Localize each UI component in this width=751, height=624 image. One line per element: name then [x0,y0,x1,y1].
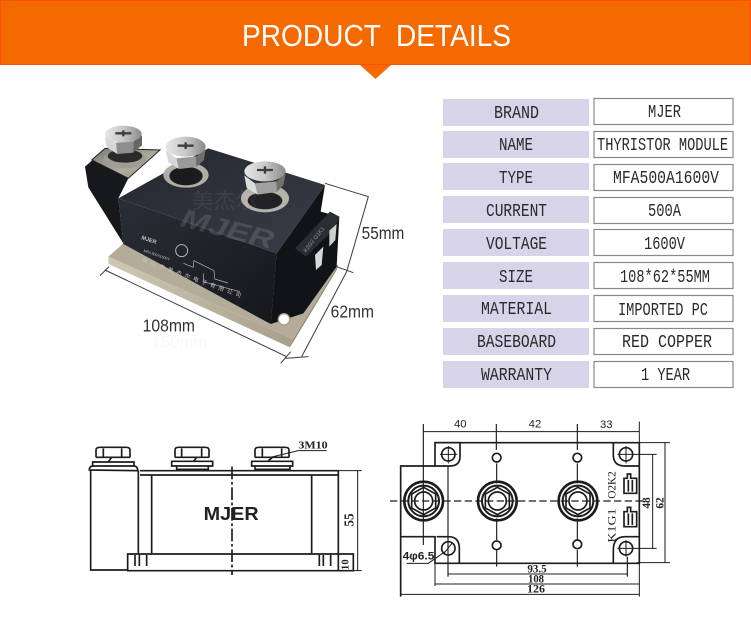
specification table [443,98,733,388]
row: size: 108*62*55MM [620,268,710,288]
mounting hole [278,314,290,325]
row: name [443,131,733,158]
row: voltage: VOLTAGE [486,235,547,255]
row: brand [443,98,733,126]
product photo [85,126,404,363]
dimension: 55 [338,471,362,571]
bottom dimensions: 126 [527,584,545,596]
top dimensions [423,418,639,443]
row: material [443,295,733,322]
row: warranty: 1 YEAR [641,366,690,386]
row: type [443,163,733,190]
title: PRODUCT DETAILS [242,18,511,53]
brand label: MJER [204,503,259,524]
row: size [443,262,733,289]
top dimensions: 40 [454,418,467,430]
module label: MFA 500A1600V [143,249,171,262]
row: name: NAME [499,136,533,156]
row: current: 500A [648,202,681,222]
top dimensions: 33 [600,419,613,431]
outline [401,443,639,597]
row: baseboard: RED COPPER [622,333,712,353]
row: type: TYPE [499,169,533,189]
row: size: SIZE [499,268,533,288]
bolt 2 [163,137,209,188]
corner ears [435,443,639,563]
row: brand: BRAND [494,104,539,124]
top view drawing: O2K2 [607,471,619,499]
terminal 3 [559,482,597,520]
callout: hole size: 4φ6.5 [403,550,434,562]
base plate [108,243,338,347]
row: voltage: 1600V [644,235,685,255]
watermark: 美杰尔 [192,183,258,215]
base flange [128,554,353,571]
row: voltage [443,229,733,256]
terminals [89,447,293,471]
row: material: MATERIAL [481,300,552,320]
terminal 1 [404,482,443,520]
bolt 3 [241,161,289,212]
dimension: 108mm: 108mm [143,316,195,336]
module label: 黄山市美杰尔电子有限公司 [141,256,243,300]
row: warranty [443,361,733,388]
center lines [390,499,643,503]
bolt 1 [103,126,147,168]
right dimensions: 62 [654,497,666,509]
module body [85,148,339,324]
row: current [443,196,733,224]
row: current: CURRENT [486,202,547,222]
dimension: 55mm: 55mm [362,223,404,243]
watermark [178,183,278,255]
top dimensions: 42 [529,418,541,430]
top view drawing [390,418,670,597]
bottom dimensions [401,563,639,597]
row: baseboard [443,328,733,355]
header banner [0,0,751,79]
mounting holes [440,446,657,557]
terminal glyphs [624,474,637,527]
module body outline [91,471,338,571]
side view drawing [89,441,362,575]
callout: 3M10 [273,441,328,457]
row: material: IMPORTED PC [618,301,708,321]
callout: hole size [403,550,445,563]
module label [140,235,243,300]
dimension: 10: 10 [341,559,352,570]
dimension lines [100,183,368,363]
module label: MJER [140,235,157,246]
row: warranty: WARRANTY [481,366,552,386]
row: type: MFA500A1600V [613,169,719,189]
right dimensions [637,443,670,563]
bottom dimensions: 93.5 [527,564,547,576]
right dimensions: 48 [641,497,653,509]
row: brand: MJER [648,103,681,123]
module body: K2G2 G1K1 [303,226,326,254]
terminal 2 [478,482,517,520]
dimension: 55: 55 [341,513,356,527]
row: baseboard: BASEBOARD [477,333,556,353]
bottom dimensions: 108 [528,574,544,586]
small holes [492,453,582,550]
terminal plate [92,148,160,178]
watermark: MJER [178,203,278,255]
faint ghost text: 150mm [152,332,207,351]
terminal labels: K1G1 [607,508,619,543]
callout: 3M10: 3M10 [298,441,328,452]
center line [229,467,234,575]
dimension: 62mm: 62mm [331,301,374,321]
